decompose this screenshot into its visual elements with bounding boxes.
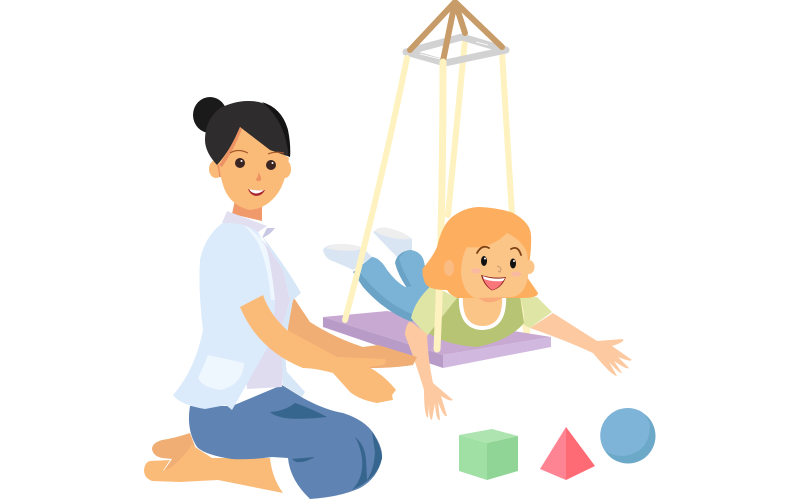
toy: green cube — [459, 429, 518, 480]
swing hanger frame — [406, 2, 506, 63]
bun — [193, 97, 227, 133]
nose — [256, 172, 261, 181]
neck — [475, 296, 505, 302]
toy: red pyramid — [540, 427, 595, 480]
left rope front — [345, 58, 407, 320]
collar — [222, 211, 267, 232]
toy: blue ball — [600, 408, 656, 464]
ears — [209, 160, 223, 178]
hair — [205, 101, 290, 165]
swing ropes behind the girl — [448, 40, 527, 332]
woman's feet — [144, 433, 283, 493]
ears — [444, 260, 454, 276]
girl's left arm, reaching down — [405, 321, 453, 420]
swing board — [323, 311, 551, 368]
shirt right panel — [262, 236, 305, 397]
pocket — [198, 355, 244, 390]
brows — [477, 247, 521, 255]
girl's right arm, reaching out — [530, 313, 632, 376]
woman's front arm — [240, 295, 396, 403]
woman's inner shirt — [240, 240, 290, 389]
woman's shirt — [173, 211, 305, 410]
girl's legs — [353, 250, 430, 322]
woman's back arm — [288, 298, 417, 368]
girl's head — [422, 207, 538, 302]
trouser shadows — [270, 403, 327, 419]
shirt main — [173, 222, 275, 410]
mouth — [481, 275, 506, 290]
hair — [422, 207, 538, 298]
woman's head — [193, 97, 291, 210]
woman's trousers — [189, 385, 382, 499]
brows — [230, 150, 284, 154]
eyes — [235, 158, 245, 168]
mouth — [248, 189, 265, 196]
girl's shirt — [411, 285, 552, 347]
girl's socks — [323, 227, 412, 270]
face — [219, 125, 289, 210]
nose — [497, 266, 501, 272]
face — [461, 233, 528, 298]
woman's neck — [232, 200, 262, 221]
cheeks — [471, 268, 481, 274]
eyes — [481, 256, 487, 266]
woman's sock band — [270, 458, 310, 499]
middle rope front — [437, 62, 443, 349]
